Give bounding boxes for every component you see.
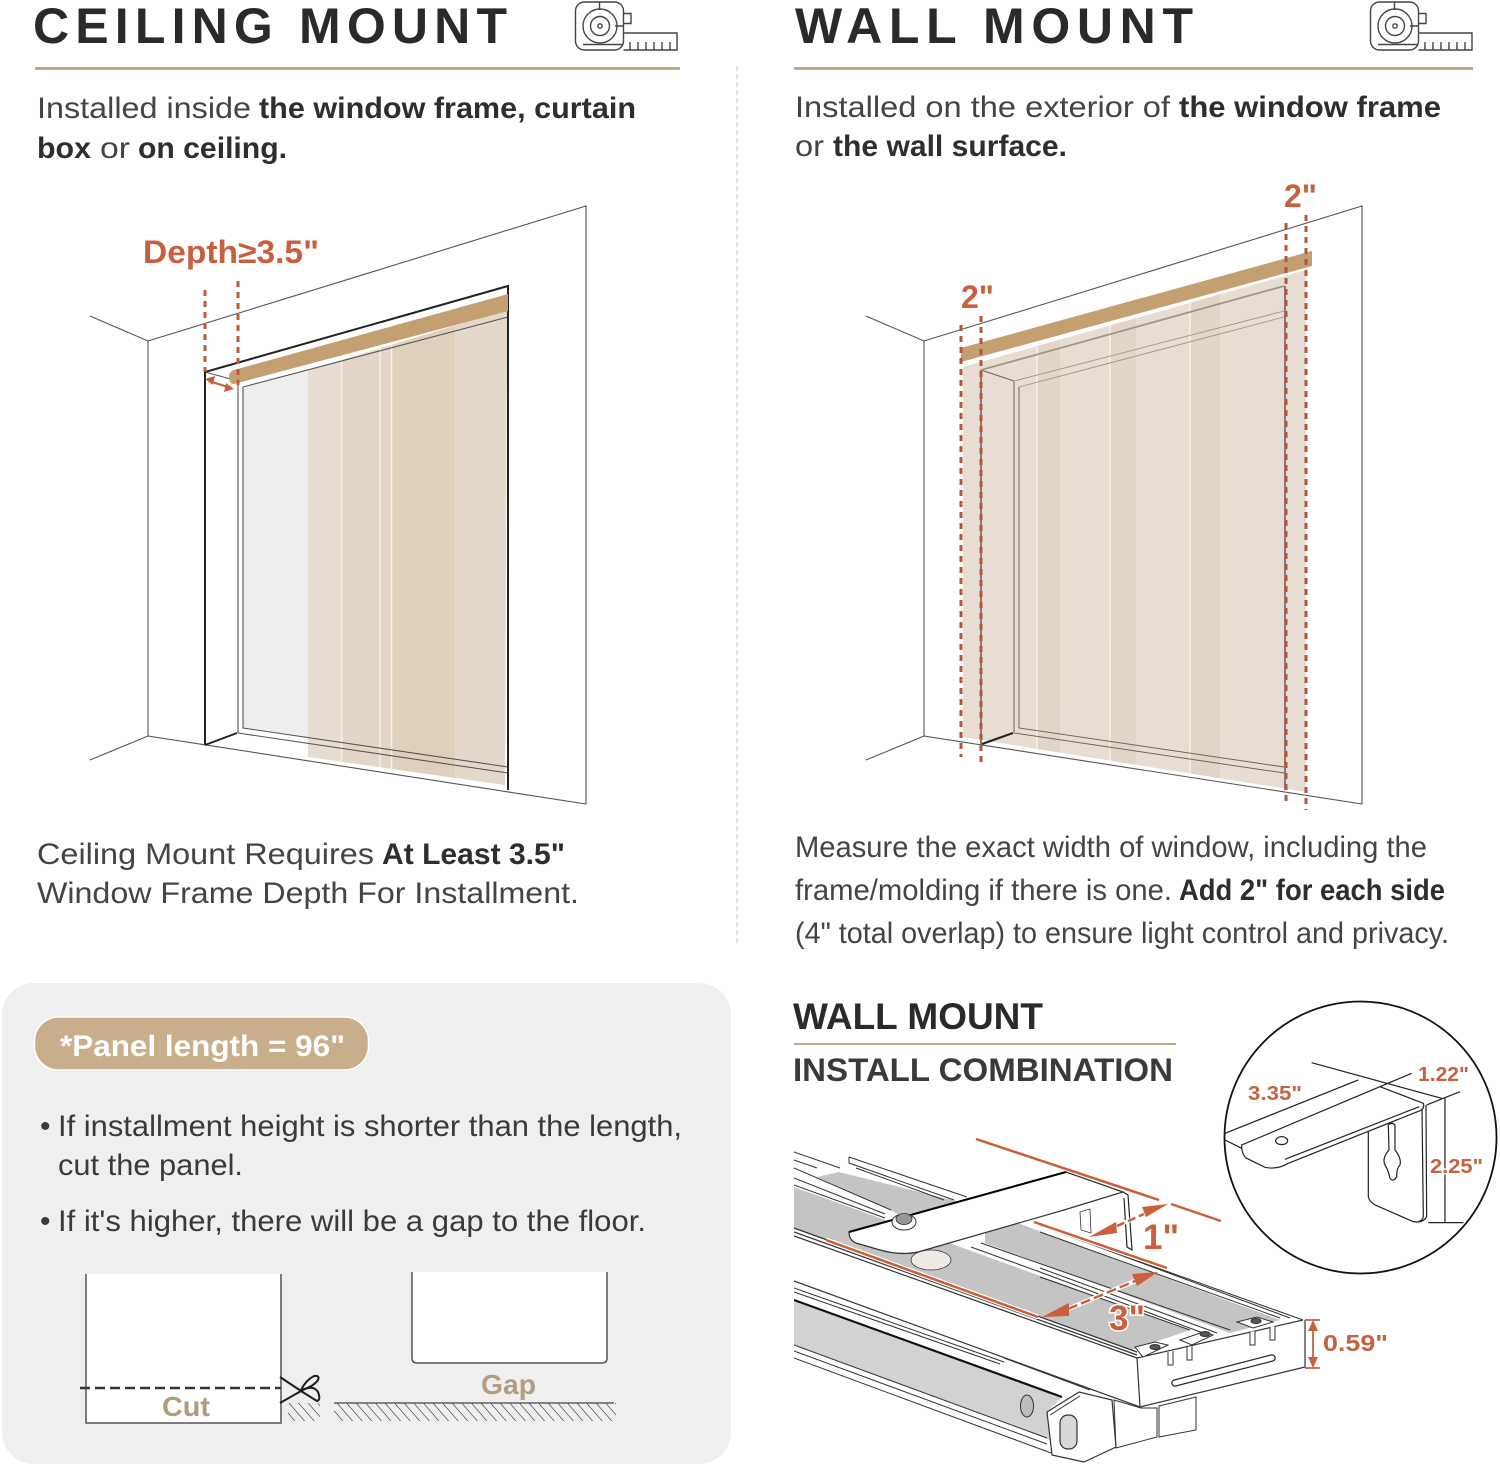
icon: tape measure (wall): [1370, 2, 1472, 50]
dimension: rail height: 0.59": [1323, 1330, 1388, 1356]
text: ceiling mount description: [37, 92, 636, 165]
valance: [794, 1301, 1062, 1440]
diagram: rail and bracket: [794, 1139, 1305, 1462]
end plates and screws: [1135, 1317, 1275, 1365]
diagram: gap panel: [412, 1272, 607, 1400]
bracket washer: [911, 1250, 951, 1270]
text: wall mount description: [795, 91, 1441, 163]
bolt: [892, 1214, 916, 1230]
pill: panel length: *Panel length = 96": [60, 1030, 345, 1063]
text: ceiling mount description: Installed inside: [37, 92, 251, 125]
end cap: [1047, 1392, 1116, 1462]
dotted overlap guides: [961, 215, 1306, 810]
heading: wall mount install combination: [793, 996, 1176, 1088]
callout dimension labels: 2.25": [1430, 1156, 1483, 1178]
diagram: cut panel: Cut: [162, 1391, 210, 1422]
label: 2 inch left: 2": [961, 279, 994, 315]
window frame lines: [981, 370, 1284, 773]
icon: scissors: [280, 1376, 319, 1403]
text: wall mount measuring note: [795, 831, 1449, 950]
callout dimension labels: 3.35": [1248, 1083, 1302, 1105]
gray channels: [794, 1172, 1280, 1350]
label: 3 inch: 3": [1109, 1299, 1145, 1338]
red measure lines: [826, 1222, 1167, 1317]
floor hatch left: [288, 1403, 320, 1421]
window frame: [205, 286, 508, 790]
bullet list: cut the panel.: [58, 1149, 243, 1182]
callout dimension labels: [1248, 1064, 1483, 1178]
window glass: [243, 370, 310, 738]
text: ceiling mount requirement: [37, 838, 579, 910]
callout dimension labels: 1.22": [1418, 1064, 1469, 1086]
depth arrow: [205, 376, 234, 392]
text: wall mount measuring note: Add 2" for each side: [1179, 874, 1445, 907]
front face: [794, 1236, 1305, 1407]
diagram: cut panel: [80, 1274, 281, 1423]
curtain rod: [229, 294, 508, 384]
text: ceiling mount description: or: [100, 132, 130, 165]
pill: panel length: [34, 1017, 368, 1070]
text: wall mount measuring note: Measure the exact width of window, including the: [795, 831, 1427, 864]
text: ceiling mount description: the window frame, curtain: [259, 92, 636, 125]
heading: wall mount install combination: INSTALL COMBINATION: [793, 1052, 1173, 1088]
lower blocks: [1114, 1397, 1196, 1448]
bracket plate: [849, 1172, 1123, 1254]
heading: wall mount install combination: WALL MOUNT: [793, 996, 1043, 1037]
text: ceiling mount description: box: [37, 132, 91, 165]
panel: panel length notes: [2, 983, 731, 1464]
valance hole: [1020, 1395, 1034, 1417]
text: wall mount description: Installed on the exterior of: [795, 91, 1171, 124]
diagram: ceiling mount window: [90, 206, 586, 804]
keyhole: [1384, 1123, 1400, 1180]
text: wall mount measuring note: (4" total overlap) to ensure light control and privacy.: [795, 917, 1449, 950]
callout: bracket detail: [1224, 1002, 1496, 1274]
room wall outline: [90, 206, 586, 804]
dimension: rail height: [1305, 1320, 1388, 1368]
diagram: wall mount window: [866, 178, 1362, 810]
diagram: gap panel: Gap: [481, 1369, 536, 1400]
text: wall mount description: or: [795, 130, 824, 163]
text: ceiling mount requirement: Window Frame Depth For Installment.: [37, 877, 579, 910]
curtain rod: [961, 251, 1312, 362]
text: wall mount description: the wall surface.: [833, 130, 1067, 163]
bullet list: •: [40, 1110, 51, 1143]
text: ceiling mount description: on ceiling.: [138, 132, 287, 165]
curtain panels: [960, 260, 1310, 800]
floor hatch right: [334, 1403, 616, 1421]
1 inch arrow: [1089, 1204, 1168, 1237]
label: 2 inch right: 2": [1284, 178, 1317, 214]
front slot: [1175, 1358, 1272, 1383]
rail lines: [794, 1152, 1303, 1333]
text: wall mount measuring note: frame/molding if there is one.: [795, 874, 1172, 907]
text: wall mount description: the window frame: [1179, 91, 1441, 124]
3 inch arrow: [1042, 1272, 1158, 1317]
bullet list: If it's higher, there will be a gap to the floor.: [58, 1205, 646, 1238]
icon: tape measure (ceiling): [576, 2, 677, 50]
room wall outline: [866, 206, 1362, 804]
bullet list: •: [40, 1205, 51, 1238]
bracket dimension lines: [1225, 1063, 1463, 1223]
bracket body: [1368, 1105, 1427, 1222]
bullet list: If installment height is shorter than the length,: [58, 1110, 682, 1143]
depth dotted guides: [205, 281, 238, 385]
window inner lines: [205, 317, 508, 773]
bullet list: [40, 1110, 682, 1238]
bracket inner wall: [1032, 1197, 1127, 1247]
curtain panels: [308, 300, 508, 800]
text: ceiling mount requirement: At Least 3.5": [382, 838, 565, 871]
label: 1 inch: 1": [1143, 1218, 1179, 1257]
text: ceiling mount requirement: Ceiling Mount Requires: [37, 838, 374, 871]
depth label: Depth≥3.5": [143, 234, 319, 270]
